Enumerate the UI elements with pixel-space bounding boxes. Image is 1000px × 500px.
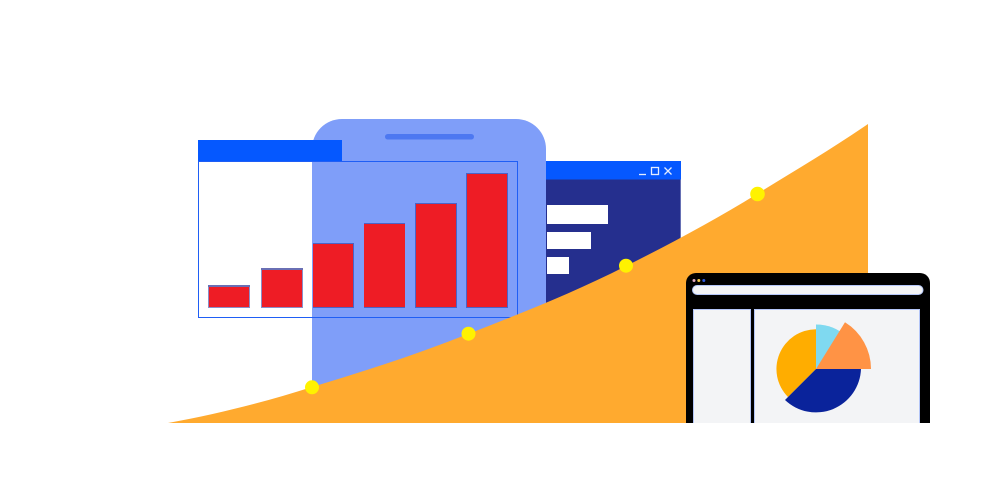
chart frame [198, 162, 518, 318]
area chart: growth curve [168, 124, 868, 423]
browser buttons [692, 279, 705, 282]
panel: phone [312, 119, 546, 423]
icon: window controls [639, 168, 672, 174]
panel: bar chart window [198, 140, 518, 318]
panel: browser window [686, 273, 930, 423]
content panel [754, 309, 920, 423]
pie chart [776, 322, 871, 412]
window title bar [540, 161, 681, 180]
phone speaker [385, 134, 474, 140]
chart title bar [198, 140, 342, 162]
horizontal bars [547, 205, 608, 274]
panel: dark blue window [540, 161, 681, 321]
address bar [692, 286, 923, 294]
bar chart [208, 173, 508, 308]
sidebar panel [693, 309, 751, 423]
data points [305, 187, 765, 394]
